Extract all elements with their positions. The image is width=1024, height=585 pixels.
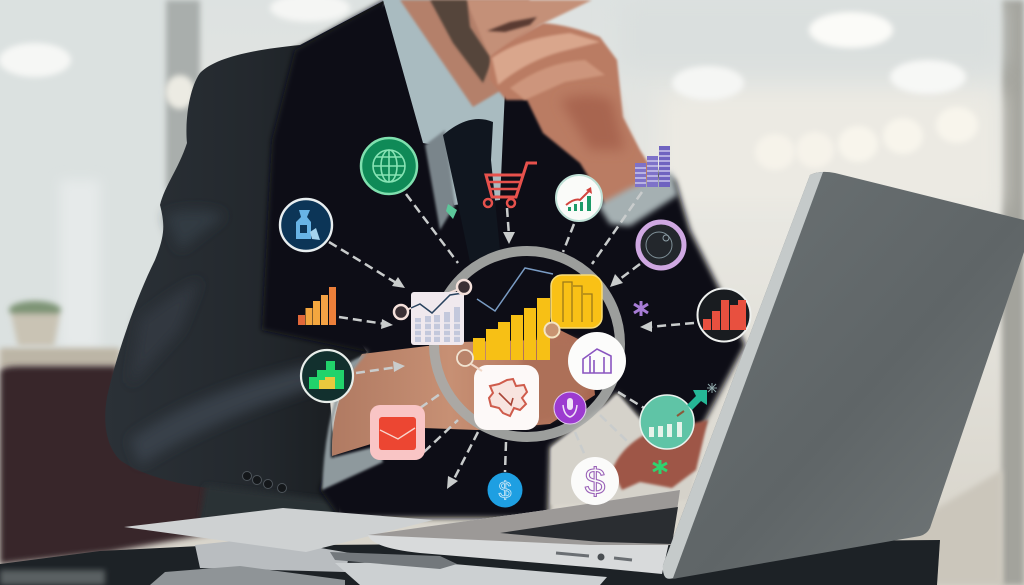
arrow: orange bars <box>339 317 385 324</box>
icon: blue dollar: $ <box>499 477 512 503</box>
icon: red bars <box>698 288 750 342</box>
icon: building circle <box>568 332 626 390</box>
arrow: dollar white <box>575 432 586 458</box>
arrow: cart <box>507 208 509 236</box>
arrow: radar <box>616 264 640 282</box>
icon: badge <box>280 199 332 251</box>
raised hand <box>490 23 665 212</box>
potted plant <box>9 301 61 346</box>
arrow: red bars <box>648 323 694 327</box>
icon: green bars <box>301 350 353 402</box>
icon: teal growth <box>640 383 717 449</box>
table reflection <box>0 570 105 585</box>
icon: radar <box>638 222 684 268</box>
icon: shopping cart <box>484 163 537 207</box>
suit sleeve <box>105 0 385 520</box>
shirt cuff left <box>322 353 383 490</box>
icon: green asterisk <box>653 460 667 474</box>
arrow: lower left <box>452 432 478 483</box>
papers <box>124 508 607 585</box>
badge: lock pin <box>457 350 482 371</box>
typing hand <box>612 420 708 490</box>
arrow: trend circle <box>563 224 574 252</box>
icon: white dollar <box>571 457 619 505</box>
icon: purple stacked bars <box>635 146 670 187</box>
icon: blue dollar <box>488 472 522 508</box>
panel: line chart card <box>394 280 471 345</box>
icon: white dollar: $ <box>585 461 605 502</box>
chart: yellow bars <box>473 298 550 360</box>
badge: small ring <box>544 322 560 338</box>
panel: yellow chart tile <box>551 275 602 328</box>
table <box>0 540 940 585</box>
white wall gap <box>551 394 700 505</box>
shirt and tie <box>383 0 530 262</box>
arrow: mail <box>424 420 458 452</box>
icon: orange bars <box>298 287 336 325</box>
arrow: teal <box>600 415 628 442</box>
purple-side shirt cuff <box>598 172 678 226</box>
dashed connector arrows <box>329 192 694 483</box>
thin line chart <box>477 268 553 311</box>
arrow: green bars <box>356 367 398 373</box>
arrow: purple stack <box>592 192 642 264</box>
arrow: dollar blue <box>505 442 506 472</box>
icon: asterisk purple <box>634 301 648 316</box>
small star green <box>446 204 457 219</box>
jacket buttons <box>242 472 286 492</box>
arrow: mail top <box>420 394 440 408</box>
icon: gear tile <box>474 365 539 430</box>
suit body <box>262 0 745 518</box>
laptop lid <box>663 172 1024 579</box>
central ring <box>434 251 620 437</box>
laptop base <box>368 490 680 574</box>
arrow: globe <box>406 194 458 263</box>
arrow heads <box>381 232 652 489</box>
arrow: teal top <box>618 392 644 408</box>
arrow: badge <box>329 242 398 284</box>
icon: microphone <box>554 392 586 424</box>
icon: trend circle <box>556 175 602 221</box>
icon: mail tile <box>370 405 425 460</box>
chair <box>0 366 230 564</box>
icon: globe <box>361 138 417 194</box>
face and beard <box>430 0 592 83</box>
forearm and hand <box>332 330 595 456</box>
right floor <box>900 470 1002 585</box>
